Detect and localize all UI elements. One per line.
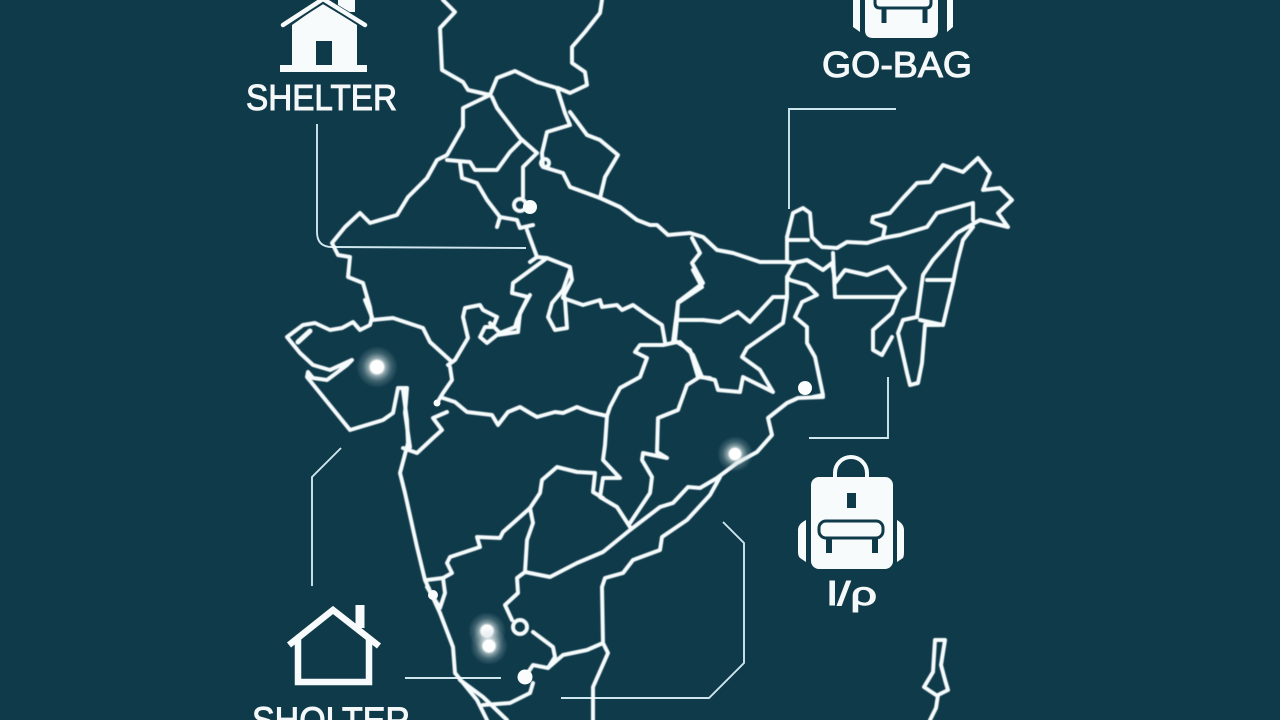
label: go-bag: GO-BAG — [822, 44, 972, 85]
icon: backpack lower — [798, 457, 904, 569]
icon: filled house — [280, 0, 367, 72]
glowing hotspots — [356, 346, 753, 665]
icon: backpack top — [853, 0, 953, 38]
city dots on the map — [428, 200, 812, 684]
map of India with state borders — [287, 0, 1012, 720]
connector lines — [312, 109, 896, 698]
label: garbled text under backpack: l/ρ — [827, 575, 877, 612]
label: shelter: SHELTER — [246, 77, 397, 118]
icon: outline house — [289, 605, 379, 682]
